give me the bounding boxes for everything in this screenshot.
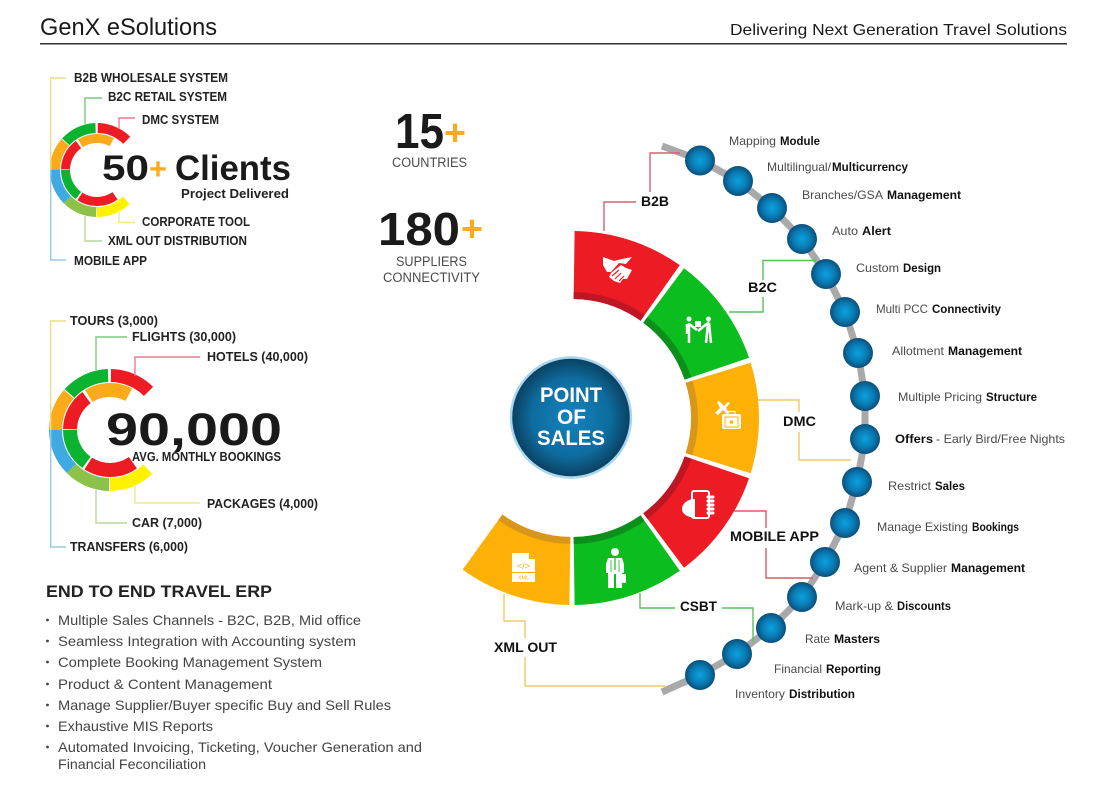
module labels: Module — [780, 134, 820, 148]
module labels: - Early Bird/Free Nights — [936, 432, 1065, 446]
travel ERP list: Manage Supplier/Buyer specific Buy and Sell Rules — [58, 697, 391, 713]
bookings ring chart: CAR (7,000) — [132, 516, 202, 530]
channel labels — [494, 193, 819, 655]
module labels: Design — [903, 261, 941, 275]
hub: point of sales — [511, 358, 631, 478]
donut: sales channels — [358, 204, 786, 632]
travel ERP list: Seamless Integration with Accounting system — [58, 633, 356, 649]
icon: xml file — [512, 553, 535, 582]
bookings ring chart: TRANSFERS (6,000) — [70, 540, 188, 554]
stat: suppliers: CONNECTIVITY — [383, 270, 480, 285]
hub: point of sales: POINT — [540, 384, 602, 407]
bookings ring chart — [33, 314, 318, 554]
module labels: Allotment — [892, 344, 945, 358]
icon: xml file: XML — [518, 576, 529, 582]
stat: suppliers — [378, 203, 483, 285]
clients ring chart: XML OUT DISTRIBUTION — [108, 234, 247, 248]
stat: countries: 15 — [395, 105, 444, 159]
module labels: Multicurrency — [832, 160, 908, 174]
travel ERP list: Financial Feconciliation — [58, 756, 206, 772]
clients ring chart: + — [149, 153, 167, 186]
module labels: Mark-up & — [835, 599, 893, 613]
channel labels: B2B — [641, 193, 669, 209]
module labels: Rate — [805, 632, 830, 646]
icon: businessman — [606, 548, 626, 588]
channel labels: CSBT — [680, 598, 717, 614]
connector lines — [504, 153, 851, 686]
module labels — [729, 134, 1065, 701]
header — [40, 14, 1067, 44]
channel labels: DMC — [783, 413, 816, 429]
clients ring chart — [38, 71, 291, 268]
beads — [685, 146, 880, 690]
stat: suppliers: 180 — [378, 203, 460, 255]
stat: countries: + — [444, 112, 466, 153]
hub: point of sales: OF — [557, 406, 586, 429]
travel ERP list: Exhaustive MIS Reports — [58, 718, 213, 734]
channel labels: MOBILE APP — [730, 528, 819, 544]
module labels: Inventory — [735, 687, 785, 701]
stat: suppliers: SUPPLIERS — [396, 254, 467, 269]
module labels: Agent & Supplier — [854, 561, 947, 575]
icon: plane and suitcase — [715, 401, 741, 429]
bookings ring chart: FLIGHTS (30,000) — [132, 330, 236, 344]
module labels: Restrict — [888, 479, 932, 493]
module labels: Management — [951, 561, 1025, 575]
bead track — [662, 146, 865, 692]
stat: suppliers: + — [461, 208, 483, 249]
clients ring chart: CORPORATE TOOL — [142, 215, 250, 229]
module labels: Multi PCC — [876, 302, 928, 316]
travel ERP list: END TO END TRAVEL ERP — [46, 582, 272, 601]
module labels: Connectivity — [932, 302, 1001, 316]
stat: countries — [392, 105, 467, 170]
icon: handshake — [603, 257, 632, 283]
module labels: Auto — [832, 224, 858, 238]
bookings ring chart: PACKAGES (4,000) — [207, 497, 318, 511]
bookings ring chart: AVG. MONTHLY BOOKINGS — [132, 450, 281, 464]
bookings ring chart: HOTELS (40,000) — [207, 350, 308, 364]
module labels: Alert — [862, 224, 891, 238]
clients ring chart: 50 — [102, 149, 149, 188]
module labels: Custom — [856, 261, 899, 275]
travel ERP list — [46, 582, 422, 772]
logo title: GenX eSolutions — [40, 14, 217, 41]
icon: phone in hand — [682, 491, 713, 518]
icon: xml file: </> — [517, 561, 530, 571]
icon: two people with box — [686, 316, 711, 343]
clients ring chart: B2B WHOLESALE SYSTEM — [74, 71, 228, 85]
module labels: Masters — [834, 632, 880, 646]
clients ring chart: B2C RETAIL SYSTEM — [108, 90, 227, 104]
module labels: Manage Existing — [877, 520, 968, 534]
hub: point of sales: SALES — [537, 427, 605, 450]
module labels: Sales — [935, 479, 965, 493]
channel labels: XML OUT — [494, 639, 557, 655]
module labels: Structure — [986, 390, 1037, 404]
clients ring chart: MOBILE APP — [74, 254, 147, 268]
module labels: Branches/GSA — [802, 188, 883, 202]
module labels: Management — [948, 344, 1022, 358]
travel ERP list: Automated Invoicing, Ticketing, Voucher Generation and — [58, 739, 422, 755]
module labels: Multiple Pricing — [898, 390, 982, 404]
clients ring chart: DMC SYSTEM — [142, 113, 219, 127]
bookings ring chart: TOURS (3,000) — [70, 314, 158, 328]
module labels: Multilingual/ — [767, 160, 832, 174]
travel ERP list: Multiple Sales Channels - B2C, B2B, Mid office — [58, 612, 361, 628]
travel ERP list: Product & Content Management — [58, 676, 272, 692]
stat: countries: COUNTRIES — [392, 155, 467, 170]
module labels: Offers — [895, 432, 933, 446]
tagline: Delivering Next Generation Travel Solutions — [730, 22, 1067, 39]
module labels: Discounts — [897, 599, 951, 613]
module labels: Management — [887, 188, 961, 202]
module labels: Distribution — [789, 687, 855, 701]
module labels: Bookings — [972, 520, 1019, 534]
module labels: Mapping — [729, 134, 776, 148]
module labels: Financial — [774, 662, 822, 676]
bookings ring chart: 90,000 — [106, 404, 282, 455]
clients ring chart: Clients — [175, 149, 291, 188]
channel labels: B2C — [748, 279, 777, 295]
travel ERP list: Complete Booking Management System — [58, 654, 322, 670]
clients ring chart: Project Delivered — [181, 186, 289, 201]
module labels: Reporting — [826, 662, 881, 676]
